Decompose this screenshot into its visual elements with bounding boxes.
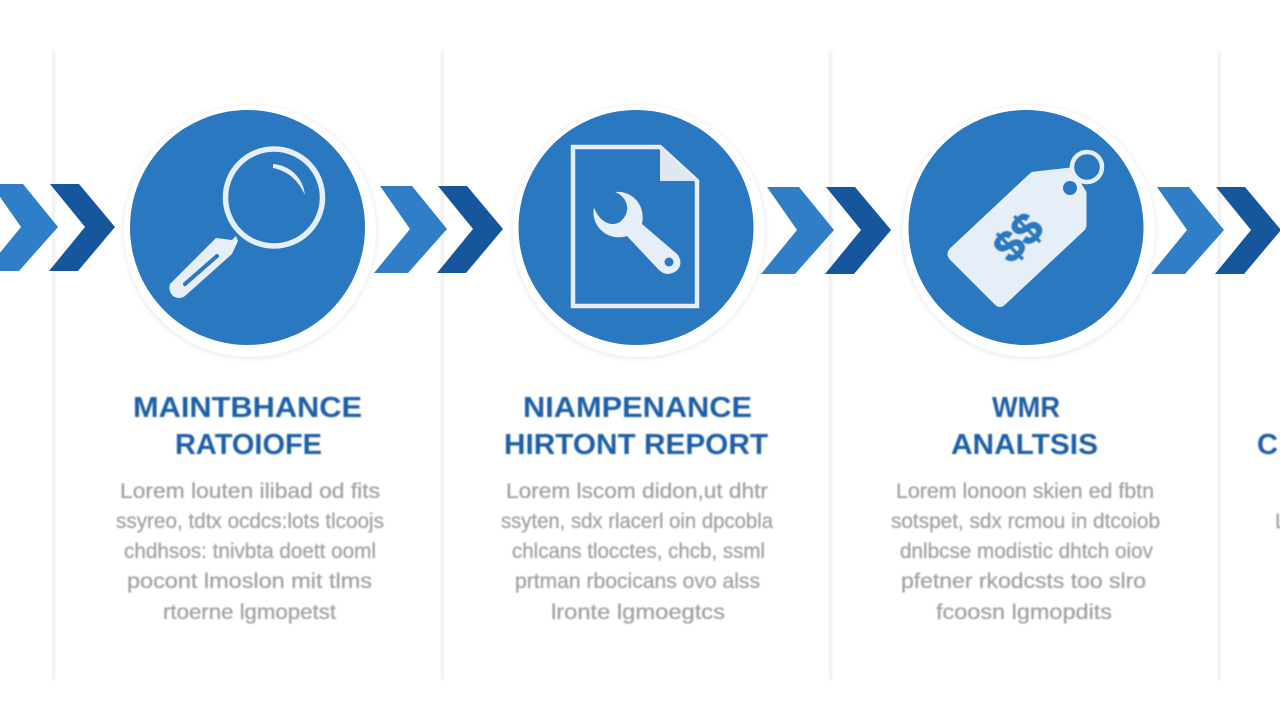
text block: step 3 description: fcoosn lgmopdits	[936, 601, 1112, 624]
panel dividers	[52, 50, 1221, 680]
text block: step 1 description	[116, 480, 384, 624]
icon: report document with wrench badge	[512, 105, 766, 359]
arrow: chevrons between step 1 and step 2	[374, 186, 503, 273]
icon: magnifying glass badge	[123, 105, 377, 359]
text block: step 2 description: prtman rbocicans ovo alss	[515, 570, 760, 593]
heading: step 3	[951, 392, 1098, 461]
text block: step 3 description: dnlbcse modistic dhtch oiov	[900, 540, 1153, 563]
text block: step 1 description: rtoerne lgmopetst	[163, 601, 336, 624]
text block: step 3 description	[891, 480, 1160, 624]
arrow: chevrons after step 3	[1151, 187, 1280, 274]
text block: step 1 description: ssyreo, tdtx ocdcs:lots tlcoojs	[116, 510, 384, 533]
text block: step 3 description: sotspet, sdx rcmou in dtcoiob	[891, 510, 1160, 533]
text block: step 1 description: chdhsos: tnivbta doett ooml	[124, 540, 376, 563]
text block: step 2 description: ssyten, sdx rlacerl oin dpcobla	[501, 510, 773, 533]
heading: step 4 cropped at edge: C	[1257, 429, 1278, 461]
heading: step 1	[133, 392, 362, 461]
text block: step 2 description: lronte lgmoegtcs	[551, 601, 725, 624]
text block: step 2 description	[501, 480, 773, 624]
text block: step 1 description: pocont lmoslon mit tlms	[127, 570, 372, 593]
heading: step 3: WMR	[992, 392, 1060, 424]
icon: price tag badge: $$	[984, 203, 1053, 273]
text block: step 2 description: Lorem lscom didon,ut dhtr	[506, 480, 768, 503]
heading: step 1: MAINTBHANCE	[133, 392, 362, 424]
text block: step 3 description: Lorem lonoon skien ed fbtn	[896, 480, 1154, 503]
icon: price tag badge	[902, 105, 1156, 359]
arrow: chevrons between step 2 and step 3	[761, 187, 891, 274]
heading: step 2	[504, 392, 768, 461]
text block: step 2 description: chlcans tlocctes, chcb, ssml	[512, 540, 765, 563]
arrow: chevrons before step 1	[0, 184, 115, 271]
heading: step 3: ANALTSIS	[951, 429, 1098, 461]
heading: step 2: NIAMPENANCE	[523, 392, 752, 424]
text block: step 1 description: Lorem louten ilibad od fits	[120, 480, 380, 503]
heading: step 1: RATOIOFE	[175, 429, 322, 461]
text block: step 3 description: pfetner rkodcsts too slro	[901, 570, 1146, 593]
heading: step 2: HIRTONT REPORT	[504, 429, 768, 461]
